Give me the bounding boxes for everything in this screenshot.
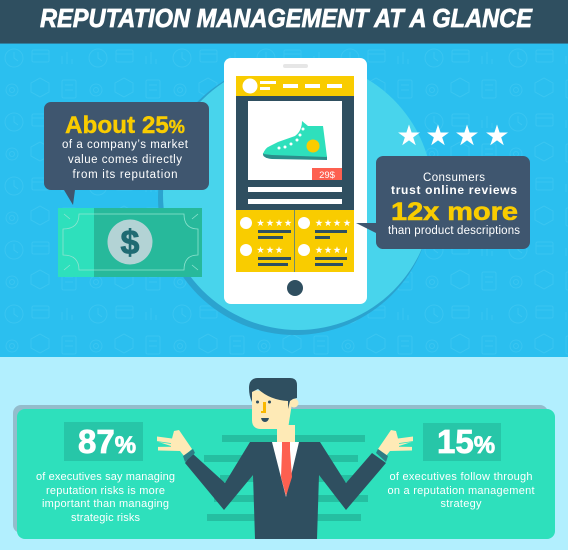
stat: 15 percent: strategy bbox=[440, 498, 482, 510]
left hand bbox=[157, 430, 192, 456]
backdrop circle bbox=[158, 60, 433, 335]
stat: 15 percent: of executives follow through bbox=[390, 471, 532, 483]
stat: 87 percent: of executives say managing bbox=[36, 471, 175, 483]
header band bbox=[0, 0, 568, 44]
panel: online reputation bbox=[0, 44, 568, 357]
phone bbox=[224, 58, 367, 304]
callout: 25 percent: About 25% bbox=[65, 112, 185, 139]
phone home button bbox=[287, 280, 303, 296]
callout: 12x more bbox=[356, 156, 530, 249]
icon: sneaker bbox=[263, 121, 327, 160]
eyes bbox=[256, 400, 259, 404]
nose bbox=[261, 402, 266, 413]
callout: 25 percent: from its reputation bbox=[72, 169, 178, 181]
panel: executives bbox=[0, 357, 568, 550]
icon: banknote bbox=[58, 208, 202, 277]
product image bbox=[248, 101, 342, 181]
callout: 12x more: 12x more bbox=[391, 198, 518, 226]
stat: 87 percent: strategic risks bbox=[71, 512, 140, 524]
callout: 25 percent: value comes directly bbox=[68, 154, 182, 166]
stat: 87 percent bbox=[36, 422, 175, 524]
illustration: businessman bbox=[157, 378, 413, 539]
stat: 15 percent: 15% bbox=[437, 423, 495, 460]
stat: 87 percent: reputation risks is more bbox=[46, 485, 165, 497]
callout: 12x more: than product descriptions bbox=[388, 225, 520, 237]
mouth bbox=[261, 418, 269, 422]
stat: 15 percent: on a reputation management bbox=[388, 485, 534, 497]
background stripes bbox=[204, 435, 368, 521]
callout: 12x more: trust online reviews bbox=[391, 183, 517, 197]
hair bbox=[249, 378, 297, 409]
face bbox=[252, 390, 292, 429]
icon: four stars bbox=[398, 124, 508, 145]
ear bbox=[290, 398, 298, 408]
stat: 87 percent: 87% bbox=[78, 423, 136, 460]
callout: 12x more: Consumers bbox=[423, 172, 485, 184]
jacket bbox=[185, 442, 386, 539]
reviews grid bbox=[236, 210, 354, 272]
cuffs bbox=[183, 449, 195, 462]
shirt bbox=[272, 442, 299, 497]
price tag: 29$ bbox=[319, 170, 336, 181]
phone top bar bbox=[236, 76, 354, 96]
stat: 87 percent: important than managing bbox=[42, 498, 169, 510]
right hand bbox=[378, 430, 413, 456]
stat: 15 percent bbox=[388, 423, 534, 510]
callout: 25 percent: of a company’s market bbox=[62, 139, 189, 151]
tie bbox=[281, 442, 292, 496]
callout: 25 percent bbox=[44, 102, 209, 205]
icon: banknote: $ bbox=[121, 224, 140, 262]
neck bbox=[277, 425, 295, 444]
title: REPUTATION MANAGEMENT AT A GLANCE bbox=[40, 3, 533, 33]
